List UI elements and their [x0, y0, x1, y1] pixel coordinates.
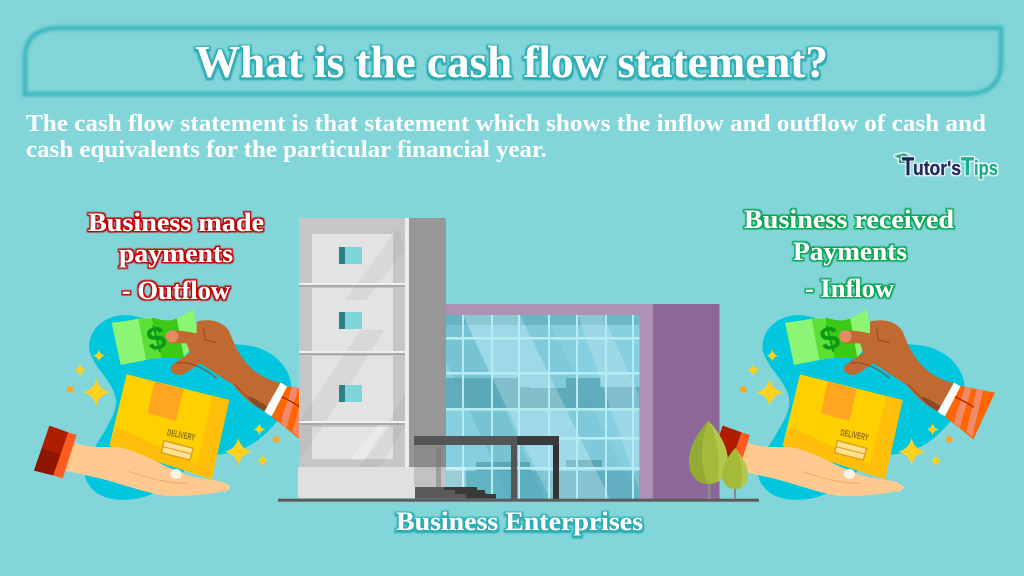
logo: Tutor's Tips: utor's [913, 158, 961, 180]
logo: Tutor's Tips: T [961, 153, 974, 181]
label: inflow: Payments [793, 236, 907, 266]
label: outflow [88, 207, 264, 305]
trees [689, 421, 748, 499]
banknote: $ [816, 319, 844, 359]
icon: graduation cap [894, 153, 910, 163]
description text: The cash flow statement is that statement which shows the inflow and outflow of cash and [26, 110, 986, 137]
description text: cash equivalents for the particular financial year. [26, 136, 547, 163]
tower [298, 218, 446, 498]
illustration: inflow, hands exchanging money and parcel [707, 309, 995, 500]
parcel: DELIVERY [840, 427, 870, 443]
banknote [112, 309, 199, 365]
sparkles [67, 350, 279, 467]
label: inflow: Business received [744, 204, 954, 234]
entrance and canopy [414, 436, 559, 499]
banknote [785, 309, 873, 365]
parcel [783, 374, 903, 479]
illustration: outflow, hands exchanging money and parcel [34, 309, 322, 500]
label: inflow [744, 204, 954, 303]
glass facade [446, 315, 640, 499]
label: outflow: payments [119, 238, 233, 268]
description text [26, 110, 986, 163]
label: inflow: - Inflow [805, 273, 894, 303]
label: outflow: - Outflow [122, 275, 230, 305]
label: outflow: Business made [88, 207, 264, 237]
building [278, 218, 759, 502]
left hand [34, 426, 230, 496]
title: What is the cash flow statement? [195, 36, 828, 87]
windows [339, 247, 362, 402]
parcel: DELIVERY [166, 427, 196, 443]
sparkles [740, 350, 953, 467]
logo: Tutor's Tips: ips [974, 158, 998, 180]
banknote: $ [143, 319, 171, 359]
title banner [25, 28, 1001, 94]
parcel [109, 374, 229, 479]
left hand [707, 426, 904, 496]
ground line [278, 499, 759, 502]
right hand [166, 320, 322, 439]
blob [758, 315, 965, 500]
purple frame [446, 304, 720, 499]
blob [85, 315, 291, 500]
logo: Tutor's Tips [894, 153, 998, 181]
logo: Tutor's Tips: T [902, 153, 914, 181]
right hand [839, 320, 995, 439]
label: business enterprises: Business Enterprises [396, 506, 643, 536]
